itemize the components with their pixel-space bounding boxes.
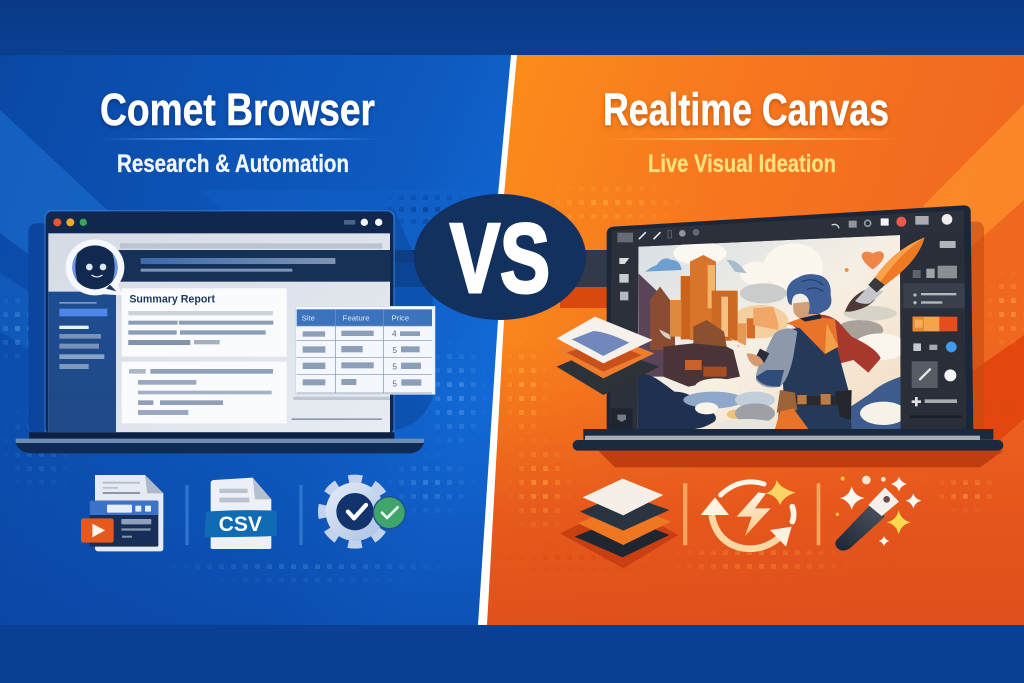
icon: web page and video document: [81, 475, 163, 551]
comparison table: 5: [392, 361, 397, 371]
left tool strip: [611, 258, 633, 429]
character: artist with cape: [730, 274, 881, 429]
right tool panel: [903, 233, 965, 429]
comparison table: [293, 306, 435, 400]
heading: Comet Browser: Comet Browser: [100, 84, 375, 135]
laptop base: [16, 432, 424, 453]
heading: Realtime Canvas: Realtime Canvas: [603, 84, 889, 135]
icon: realtime refresh with lightning: [701, 480, 796, 549]
comparison table: Feature: [343, 314, 370, 323]
heading: Comet Browser: [100, 84, 382, 178]
icon: assistant chat bubble: [66, 239, 124, 295]
panel: orange background: [480, 55, 1024, 625]
heading: Realtime Canvas: Live Visual Ideation: [648, 150, 836, 178]
icon: stacked layers: [560, 479, 678, 568]
canvas app frame: [607, 205, 973, 432]
heading: Realtime Canvas: [603, 84, 897, 178]
comparison table: Site: [302, 314, 315, 323]
VS badge: [414, 194, 586, 320]
foreground clouds: [638, 373, 907, 431]
laptop base: [573, 429, 1003, 451]
icon: paintbrush: [845, 237, 925, 312]
icon: magic wand with sparkles: [835, 476, 921, 551]
icon: CSV file: [204, 478, 277, 549]
icon row: Realtime Canvas: [560, 476, 921, 568]
heading: Comet Browser: Research & Automation: [117, 150, 349, 178]
laptop: Realtime Canvas: [553, 205, 1003, 467]
page header: [117, 243, 390, 282]
top band: [0, 0, 1024, 56]
illustration canvas: [638, 235, 907, 431]
VS badge: VS: [450, 203, 550, 313]
summary report card: Summary Report: [129, 294, 215, 306]
sidebar: [48, 292, 116, 432]
icon: CSV file: CSV: [219, 512, 263, 536]
panel: blue background: [0, 55, 520, 625]
icon: layers stack: [553, 317, 659, 395]
VS connector band left: [380, 250, 440, 287]
comparison table: 5: [392, 378, 397, 388]
clouds and sky: [645, 242, 907, 360]
browser controls: [53, 218, 382, 226]
city buildings: [638, 255, 778, 387]
comparison table: 5: [392, 345, 397, 355]
top toolbar: [617, 214, 952, 242]
comparison table: 4: [392, 328, 397, 338]
divider line: [478, 55, 517, 625]
details card: [122, 362, 287, 423]
VS connector band right: [560, 250, 620, 308]
summary report card: [122, 288, 287, 357]
icon: heart: [862, 251, 884, 269]
icon row: Comet Browser: [81, 475, 405, 551]
browser screen: [48, 233, 390, 432]
laptop: Comet Browser: [16, 210, 435, 453]
icon: gear with checks: [324, 481, 405, 542]
comparison table: Price: [392, 314, 409, 323]
bottom band: [0, 625, 1024, 683]
